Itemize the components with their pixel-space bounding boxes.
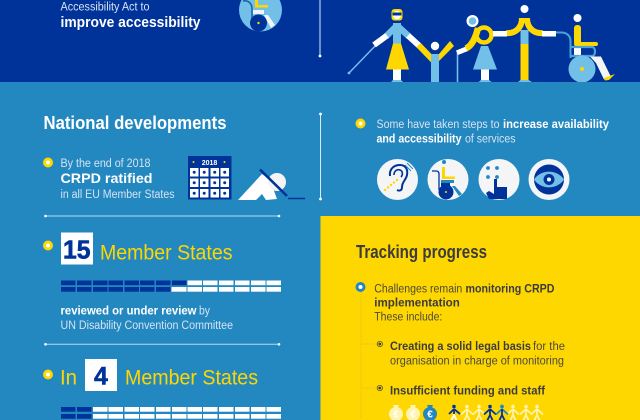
text: legal basis: Creating a solid legal basis [390, 341, 531, 353]
bullet: legal basis [377, 341, 382, 347]
chart: 4 of 28 units [61, 407, 281, 419]
text: reviewed or under review: by [199, 306, 210, 318]
text: increase availability: increase availability [503, 119, 610, 131]
icon: row of people [449, 405, 543, 420]
icon: hand signing with pen [238, 170, 305, 200]
bullet: blue [357, 284, 364, 290]
bullet [357, 120, 364, 127]
text: accessibility act: Accessibility Act to [60, 2, 150, 14]
block: in 4 Member States [44, 359, 281, 419]
panel: tracking progress [320, 216, 640, 420]
text: reviewed or under review: reviewed or under review [60, 306, 197, 318]
label: member states: Member States [100, 242, 232, 264]
number box: 4: 4 [94, 362, 108, 390]
bullet [44, 371, 52, 378]
bullet [44, 159, 52, 166]
icon: calendar 2018: 2018 [202, 160, 217, 167]
block: 15 Member States [44, 232, 281, 332]
number box: 15: 15 [63, 234, 90, 264]
divider: top vertical [319, 0, 321, 57]
icon: braille and finger [478, 159, 520, 200]
figure: man holding hands [493, 5, 556, 82]
text: CRPD ratified [60, 158, 175, 201]
text: increase availability [376, 119, 610, 146]
icon: hearing ear [377, 159, 418, 200]
bullet: funding [377, 385, 382, 391]
divider: horizontal one [44, 215, 280, 217]
text: CRPD ratified: By the end of 2018 [60, 158, 150, 170]
icon: wheelchair user [428, 159, 468, 200]
text: increase availability: Some have taken steps to [376, 119, 500, 131]
panel: top banner [0, 0, 640, 82]
divider: middle vertical [319, 113, 322, 200]
text: accessibility act: improve accessibility [60, 15, 200, 31]
heading: tracking progress: Tracking progress [356, 242, 487, 262]
icon: calendar 2018 [188, 156, 232, 200]
figure: person in wheelchair [556, 14, 615, 82]
divider: horizontal two [44, 343, 280, 346]
text: legal basis [390, 341, 565, 368]
text: challenges [374, 284, 554, 324]
heading: national developments: National developments [44, 113, 226, 133]
block: services accessibility [357, 119, 610, 200]
text: CRPD ratified: CRPD ratified [60, 170, 152, 186]
illustration: group of people with disabilities [348, 5, 615, 82]
text: challenges: Challenges remain [374, 284, 462, 296]
text: increase availability: and accessibility [376, 134, 462, 146]
number box: 4 [85, 359, 117, 391]
text: challenges: implementation [374, 298, 460, 310]
text: increase availability: of services [465, 134, 516, 146]
text: accessibility act [60, 2, 200, 31]
text: legal basis: organisation in charge of monitoring [390, 356, 564, 368]
label: in: In [60, 366, 77, 390]
icon: money bags [389, 405, 437, 420]
text: reviewed or under review [60, 306, 233, 332]
label: member states second: Member States [125, 366, 258, 390]
text: legal basis: for the [533, 341, 565, 353]
figure: older woman with walking stick [456, 15, 497, 82]
icon: eye [528, 159, 570, 200]
text: funding and staff: Insufficient funding and staff [390, 386, 545, 398]
icon: wheelchair in circle [239, 0, 282, 32]
block: CRPD ratified [44, 156, 305, 201]
figure: child with raised arms [431, 41, 454, 82]
chart: 15 of 28 units [61, 280, 281, 292]
bullet [44, 242, 52, 249]
text: challenges: monitoring CRPD [466, 284, 554, 296]
text: reviewed or under review: UN Disability Convention Committee [60, 320, 233, 332]
connector: dotted timeline [361, 292, 376, 420]
figure: woman with white cane [348, 9, 433, 82]
text: challenges: These include: [374, 312, 442, 324]
text: CRPD ratified: in all EU Member States [60, 189, 175, 201]
